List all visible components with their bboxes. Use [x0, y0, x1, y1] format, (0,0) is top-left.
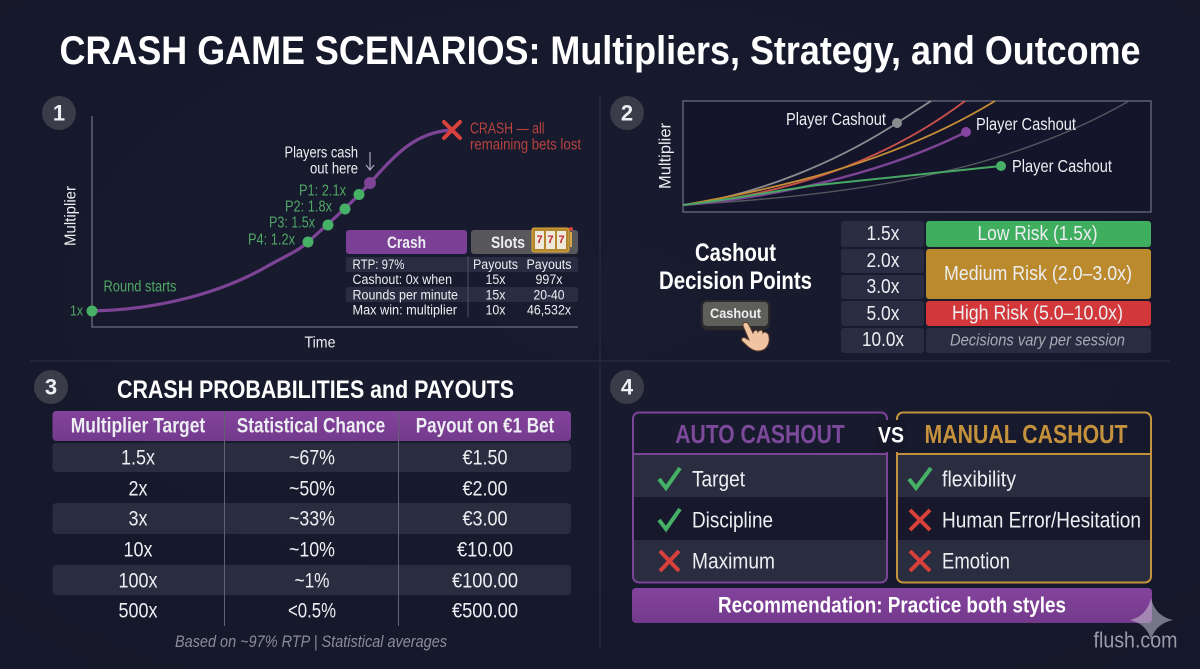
auto cashout card: AUTO CASHOUT [675, 419, 845, 449]
player cashout points: P1: 2.1x [299, 182, 346, 200]
comparison table crash vs slots: 46,532x [527, 302, 571, 318]
multi-line cashout chart [683, 101, 1151, 212]
table rows: 10x [124, 538, 153, 562]
player cashout points: P2: 1.8x [285, 198, 332, 216]
badge 4 [610, 370, 644, 404]
icon: slot machine [532, 227, 573, 252]
auto cashout card [633, 412, 887, 582]
y axis label: Multiplier [62, 186, 80, 246]
comparison table crash vs slots: Rounds per minute [352, 288, 458, 302]
multi-line cashout chart: Player Cashout [786, 109, 886, 129]
chart axes [92, 116, 578, 327]
comparison table crash vs slots: Payouts [526, 257, 572, 272]
high risk: High Risk (5.0–10.0x) [952, 302, 1123, 324]
comparison table crash vs slots [346, 227, 578, 318]
table rows [52, 411, 571, 626]
table rows: 500x [118, 600, 158, 622]
table rows: 100x [118, 570, 158, 592]
player cashout points: P4: 1.2x [248, 232, 295, 248]
crash marker: CRASH — all [470, 120, 544, 138]
low risk: Low Risk (1.5x) [978, 223, 1098, 245]
comparison table crash vs slots: Crash [387, 233, 426, 252]
panel 4: auto vs manual cashout [610, 370, 1152, 623]
table heading: CRASH PROBABILITIES and PAYOUTS [117, 376, 514, 404]
comparison table crash vs slots: 997x [536, 272, 563, 287]
decision points heading: Decision Points [659, 267, 812, 295]
badge 1 [42, 96, 76, 130]
risk table: 5.0x [866, 303, 900, 325]
comparison table crash vs slots: Max win: multiplier [352, 302, 457, 318]
decision points heading: Cashout [695, 239, 777, 267]
panel 1: crash curve chart [42, 96, 582, 352]
panel 2: cashout decision points [610, 96, 1151, 353]
table rows: €1.50 [462, 446, 508, 470]
start point [70, 302, 98, 320]
table rows: ~67% [289, 446, 335, 470]
manual cashout card: Emotion [942, 548, 1010, 574]
manual cashout card [897, 412, 1151, 582]
watermark [1094, 598, 1178, 652]
table rows: ~50% [289, 478, 335, 500]
players cash out annotation [284, 144, 374, 178]
manual cashout card: MANUAL CASHOUT [924, 419, 1128, 449]
risk table: 1.5x [866, 223, 900, 245]
round starts label: Round starts [104, 278, 177, 296]
comparison table crash vs slots: 15x [486, 272, 506, 287]
comparison table crash vs slots: 15x [486, 288, 506, 302]
recommendation bar [632, 588, 1152, 623]
risk table [841, 221, 1151, 353]
icon: cashout button with hand: Cashout [710, 305, 761, 321]
table rows: €2.00 [462, 478, 508, 500]
chart y axis label: Multiplier [656, 123, 674, 189]
x axis label: Time [304, 334, 336, 352]
comparison table crash vs slots: 20-40 [534, 288, 564, 302]
decision points heading [659, 239, 812, 295]
session note: Decisions vary per session [950, 332, 1125, 350]
comparison table crash vs slots: RTP: 97% [352, 257, 404, 272]
crash marker [444, 120, 582, 154]
table rows: 3x [128, 508, 148, 530]
badge 1: 1 [53, 100, 65, 126]
table rows: ~1% [294, 570, 330, 592]
comparison table crash vs slots: Cashout: 0x when [352, 272, 452, 287]
table rows: <0.5% [288, 600, 336, 622]
icon: slot machine: 7 [558, 234, 565, 246]
badge 4: 4 [621, 374, 634, 400]
medium risk [926, 249, 1151, 299]
auto cashout card: Maximum [692, 548, 775, 574]
crash marker: remaining bets lost [470, 136, 582, 154]
table header: Payout on €1 Bet [416, 414, 554, 438]
multi-line cashout chart: Player Cashout [1012, 156, 1112, 176]
table rows: 2x [128, 478, 148, 500]
recommendation bar: Recommendation: Practice both styles [718, 592, 1066, 618]
comparison table crash vs slots: Slots [491, 233, 525, 252]
table rows: €10.00 [457, 538, 513, 562]
manual cashout card: Human Error/Hesitation [942, 508, 1141, 532]
watermark: flush.com [1094, 628, 1178, 652]
footnote: Based on ~97% RTP | Statistical averages [175, 633, 447, 651]
manual cashout card: flexibility [942, 466, 1016, 492]
table rows: €3.00 [462, 508, 508, 530]
start point: 1x [70, 302, 83, 320]
multi-line cashout chart: Player Cashout [976, 114, 1076, 134]
table header: Multiplier Target [71, 414, 205, 438]
table rows: ~10% [289, 538, 335, 562]
table header [52, 411, 571, 441]
medium risk: Medium Risk (2.0–3.0x) [944, 263, 1132, 285]
player cashout points: P3: 1.5x [269, 214, 315, 232]
table rows: ~33% [289, 508, 335, 530]
table rows: 1.5x [121, 446, 155, 470]
comparison table crash vs slots: 10x [486, 302, 506, 318]
auto cashout card: Discipline [692, 508, 773, 532]
low risk [926, 221, 1151, 247]
comparison table crash vs slots: Payouts [473, 257, 518, 272]
icon: slot machine: 7 [547, 234, 554, 246]
player cashout points [248, 177, 376, 248]
auto cashout card: Target [692, 466, 745, 492]
multiplier curve [92, 130, 452, 311]
icon: slot machine: 7 [536, 234, 543, 246]
badge 3 [34, 370, 68, 404]
badge 2: 2 [621, 100, 633, 126]
session note [926, 328, 1151, 353]
players cash out annotation: Players cash [284, 144, 358, 162]
icon: cashout button with hand [701, 300, 770, 351]
table rows: €100.00 [452, 570, 518, 592]
badge 3: 3 [45, 374, 57, 400]
vs label: VS [878, 422, 904, 448]
risk table: 10.0x [862, 329, 904, 351]
table header: Statistical Chance [237, 414, 385, 438]
risk table: 3.0x [866, 276, 900, 298]
panel 3: probabilities table [34, 370, 571, 651]
risk table: 2.0x [866, 250, 900, 272]
players cash out annotation: out here [310, 160, 358, 178]
table rows: €500.00 [452, 600, 518, 622]
badge 2 [610, 96, 644, 130]
